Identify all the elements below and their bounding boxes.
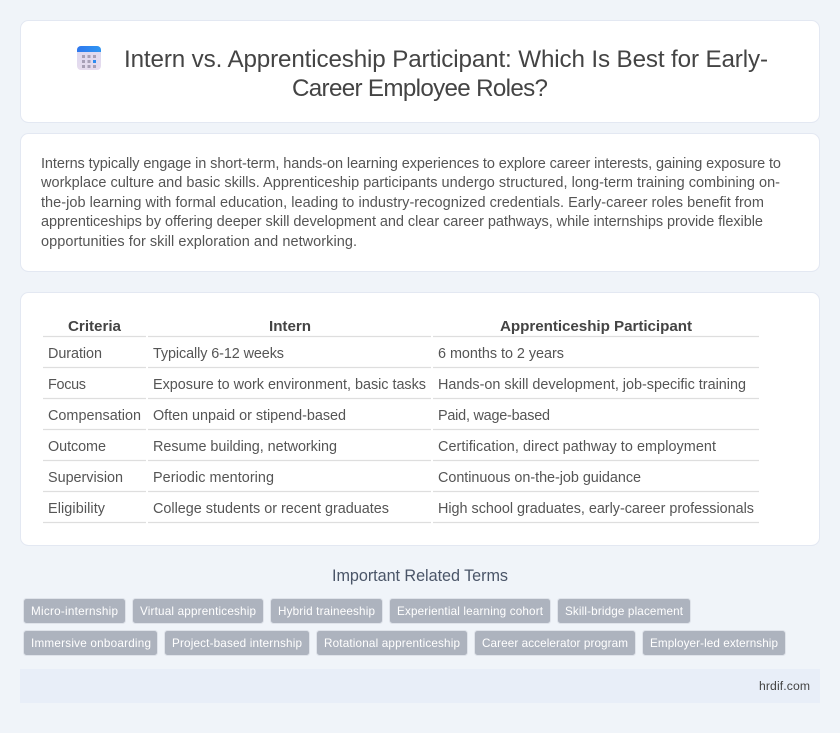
row: supervision: Periodic mentoring bbox=[153, 470, 274, 486]
row: eligibility: College students or recent graduates bbox=[153, 501, 389, 517]
tags: related terms: Project-based internship bbox=[172, 637, 302, 650]
footer bbox=[20, 669, 820, 703]
summary text: the-job learning with formal education, leading to industry-recognized credentials. Early-career roles benefit from bbox=[41, 195, 764, 211]
title: Intern vs. Apprenticeship Participant: Which Is Best for Early- bbox=[124, 46, 768, 73]
summary text: apprenticeships by offering deeper skill development and clear career pathways, while internships provide flexible bbox=[41, 214, 763, 230]
panel: summary bbox=[20, 134, 820, 272]
row: supervision: Continuous on-the-job guidance bbox=[438, 470, 641, 486]
row: outcome: Certification, direct pathway to employment bbox=[438, 439, 716, 455]
icon: calendar bbox=[77, 46, 101, 70]
row: focus: Focus bbox=[48, 377, 86, 393]
row: supervision bbox=[48, 470, 641, 486]
summary text bbox=[40, 156, 781, 250]
row: duration: Duration bbox=[48, 346, 102, 362]
summary text: Interns typically engage in short-term, hands-on learning experiences to explore career interests, gaining exposure to bbox=[41, 156, 781, 172]
row: outcome: Outcome bbox=[48, 439, 106, 455]
title: Career Employee Roles? bbox=[292, 75, 548, 102]
tags: related terms: Skill-bridge placement bbox=[565, 605, 684, 618]
tags: related terms: Rotational apprenticeship bbox=[324, 637, 460, 650]
tags: related terms: Career accelerator program bbox=[482, 637, 628, 650]
tags: related terms: Micro-internship bbox=[31, 605, 118, 618]
row: duration bbox=[48, 346, 564, 362]
footer source: hrdif.com bbox=[759, 679, 810, 693]
tags: related terms bbox=[24, 598, 786, 656]
tags: related terms: Experiential learning cohort bbox=[397, 605, 544, 618]
row: outcome bbox=[48, 439, 716, 455]
summary text: opportunities for skill exploration and networking. bbox=[41, 234, 357, 250]
row: focus bbox=[48, 377, 746, 393]
panel: header bbox=[20, 20, 820, 122]
table header row: Criteria bbox=[68, 318, 122, 335]
row: duration: Typically 6-12 weeks bbox=[153, 346, 284, 362]
row: duration: 6 months to 2 years bbox=[438, 346, 564, 362]
tags: related terms: Virtual apprenticeship bbox=[140, 605, 256, 618]
row: compensation: Paid, wage-based bbox=[438, 408, 550, 424]
tags: related terms: Immersive onboarding bbox=[31, 637, 151, 650]
table header row: Apprenticeship Participant bbox=[500, 318, 692, 335]
row: eligibility bbox=[48, 501, 754, 517]
row: focus: Exposure to work environment, basic tasks bbox=[153, 377, 426, 393]
table header row bbox=[68, 318, 692, 335]
row: compensation: Compensation bbox=[48, 408, 141, 424]
table header row: Intern bbox=[269, 318, 311, 335]
heading: related terms: Important Related Terms bbox=[332, 567, 508, 585]
summary text: workplace culture and basic skills. Apprenticeship participants undergo structured, long-term training combining on- bbox=[40, 175, 780, 191]
row: supervision: Supervision bbox=[48, 470, 123, 486]
row: outcome: Resume building, networking bbox=[153, 439, 337, 455]
row: compensation bbox=[48, 408, 550, 424]
title bbox=[124, 46, 768, 102]
row: compensation: Often unpaid or stipend-based bbox=[153, 408, 346, 424]
panel: comparison table bbox=[20, 292, 820, 546]
row: eligibility: Eligibility bbox=[48, 501, 106, 517]
row: eligibility: High school graduates, early-career professionals bbox=[438, 501, 754, 517]
tags: related terms: Employer-led externship bbox=[650, 637, 778, 650]
row: focus: Hands-on skill development, job-specific training bbox=[438, 377, 746, 393]
tags: related terms: Hybrid traineeship bbox=[278, 605, 375, 618]
